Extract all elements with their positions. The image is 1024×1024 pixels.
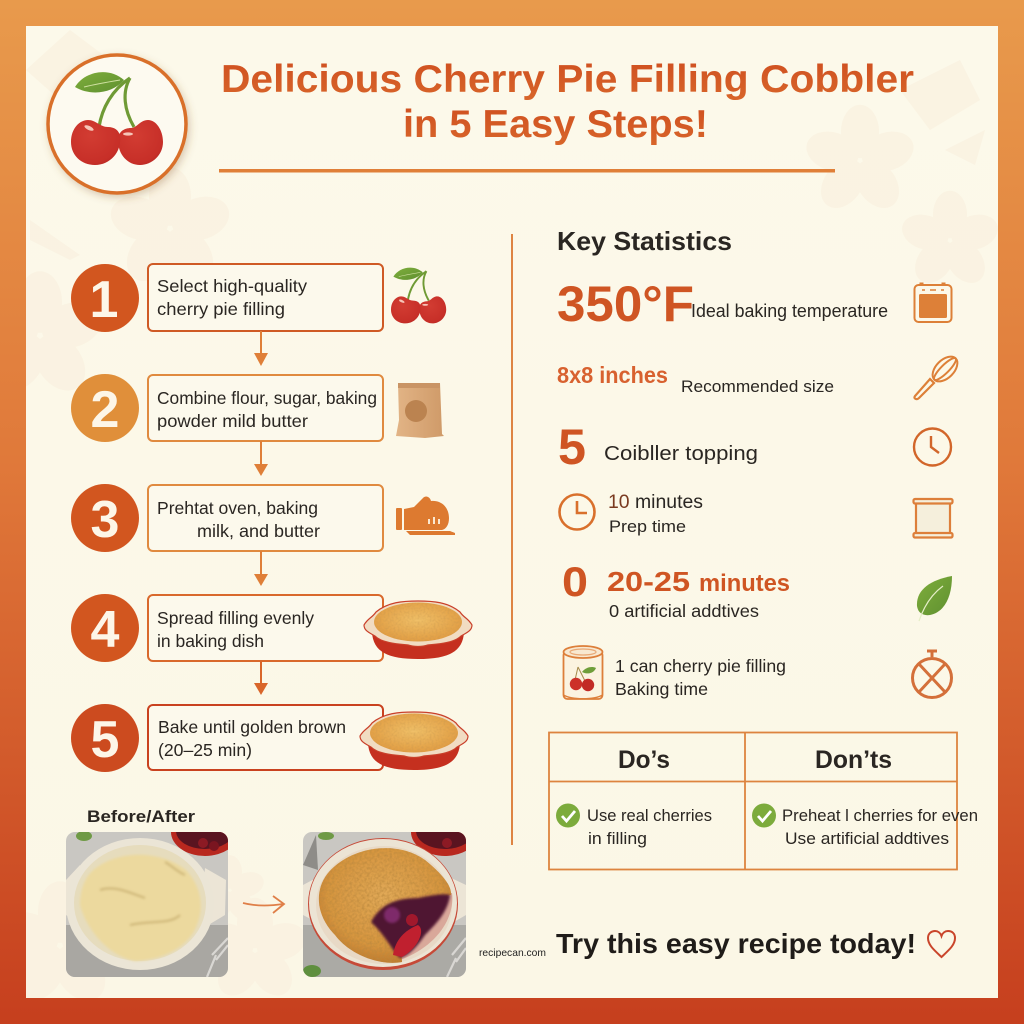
text: do item: Use real cherries — [587, 806, 712, 825]
stat: 350F — [557, 276, 888, 332]
step 3 — [71, 484, 455, 552]
heading: dos: Do’s — [618, 746, 670, 774]
step 4: 4 — [91, 601, 120, 659]
icon: baking pan — [914, 499, 952, 538]
icon: clock — [914, 428, 951, 466]
stat: 350F: 350°F — [557, 276, 694, 332]
stat: bake time and additives: 20-25 — [607, 566, 690, 597]
stat: dish size: 8x8 inches — [557, 362, 668, 388]
panel: steps — [71, 264, 472, 772]
stat: cherry filling: Baking time — [615, 679, 708, 699]
arrow: before to after — [243, 896, 284, 913]
icon: do check — [556, 804, 580, 828]
stat: cobbler topping — [558, 419, 758, 475]
stat: cobbler topping: 5 — [558, 419, 586, 475]
step 1 — [71, 264, 446, 332]
column divider — [511, 234, 513, 845]
title: Delicious Cherry Pie Filling Cobbler — [221, 58, 914, 101]
arrow: step 4 to 5 — [254, 661, 268, 695]
step 1: cherry pie filling — [157, 299, 285, 319]
icon: large cherries — [71, 72, 163, 165]
step 3: Prehtat oven, baking — [157, 498, 318, 518]
decorative faint flowers — [27, 34, 997, 262]
before/after heading: Before/After — [87, 807, 195, 826]
icon: baked cobbler dish — [360, 712, 468, 770]
stat: bake time and additives: 0 — [562, 558, 588, 605]
text: do item — [587, 806, 712, 848]
call to action: Try this easy recipe today! — [556, 928, 916, 959]
stat: cherry filling: 1 can cherry pie filling — [615, 656, 786, 676]
icon: oven mitt — [396, 497, 455, 535]
step 1: 1 — [90, 271, 118, 329]
icon: leaf — [917, 576, 952, 621]
step 2: Combine flour, sugar, baking — [157, 388, 377, 408]
photo: before baking — [66, 832, 228, 977]
heading: key statistics: Key Statistics — [557, 226, 732, 256]
step 4: Spread filling evenly — [157, 608, 314, 628]
stat: prep time — [608, 492, 703, 536]
step 5: (20–25 min) — [158, 740, 252, 760]
stat: 350F: Ideal baking temperature — [691, 301, 888, 321]
panel: key statistics — [557, 226, 962, 699]
step 3: milk, and butter — [197, 521, 320, 541]
step 4 — [71, 594, 472, 662]
icon: heart — [928, 931, 955, 957]
arrow: step 1 to 2 — [254, 331, 268, 366]
step 2 — [71, 374, 444, 442]
step 5: 5 — [91, 711, 119, 769]
icon: oven — [914, 283, 952, 322]
icon: crossed-out timer — [912, 651, 952, 698]
icon: dont check — [752, 804, 776, 828]
panel: dos and donts table — [549, 732, 978, 870]
heading: donts: Don’ts — [815, 746, 892, 774]
header cherry badge — [48, 55, 186, 193]
text: do item: in filling — [588, 829, 647, 848]
icon: cherry can — [564, 646, 602, 699]
arrow: step 2 to 3 — [254, 441, 268, 476]
stat: dish size — [557, 362, 834, 396]
stat: prep time: 10 minutes — [608, 492, 703, 513]
icon: baked cobbler dish — [364, 601, 472, 659]
stat: bake time and additives: minutes — [699, 570, 790, 597]
step 5: Bake until golden brown — [158, 717, 346, 737]
stat: cobbler topping: Coibller topping — [604, 443, 758, 465]
icon: prep clock — [560, 494, 594, 530]
text: dont item — [782, 806, 978, 848]
text: dont item: Preheat l cherries for even — [782, 806, 978, 825]
stat: cherry filling — [615, 656, 786, 699]
stat: dish size: Recommended size — [681, 377, 834, 396]
photo: after baking — [303, 832, 466, 977]
arrow: step 3 to 4 — [254, 551, 268, 586]
step 4: in baking dish — [157, 631, 264, 651]
step 2: powder mild butter — [157, 411, 308, 431]
stat: bake time and additives — [562, 558, 790, 621]
title: in 5 Easy Steps! — [403, 103, 708, 146]
step 5 — [71, 704, 468, 772]
icon: whisk — [914, 352, 962, 399]
source credit: recipecan.com — [479, 947, 546, 959]
step 3: 3 — [91, 491, 119, 549]
stat: prep time: Prep time — [609, 517, 686, 536]
title — [221, 58, 914, 146]
step 2: 2 — [91, 381, 119, 439]
step 1: Select high-quality — [157, 276, 307, 296]
icon: flour bag — [396, 383, 444, 438]
stat: bake time and additives: 0 artificial addtives — [609, 601, 759, 621]
text: dont item: Use artificial addtives — [785, 829, 949, 848]
